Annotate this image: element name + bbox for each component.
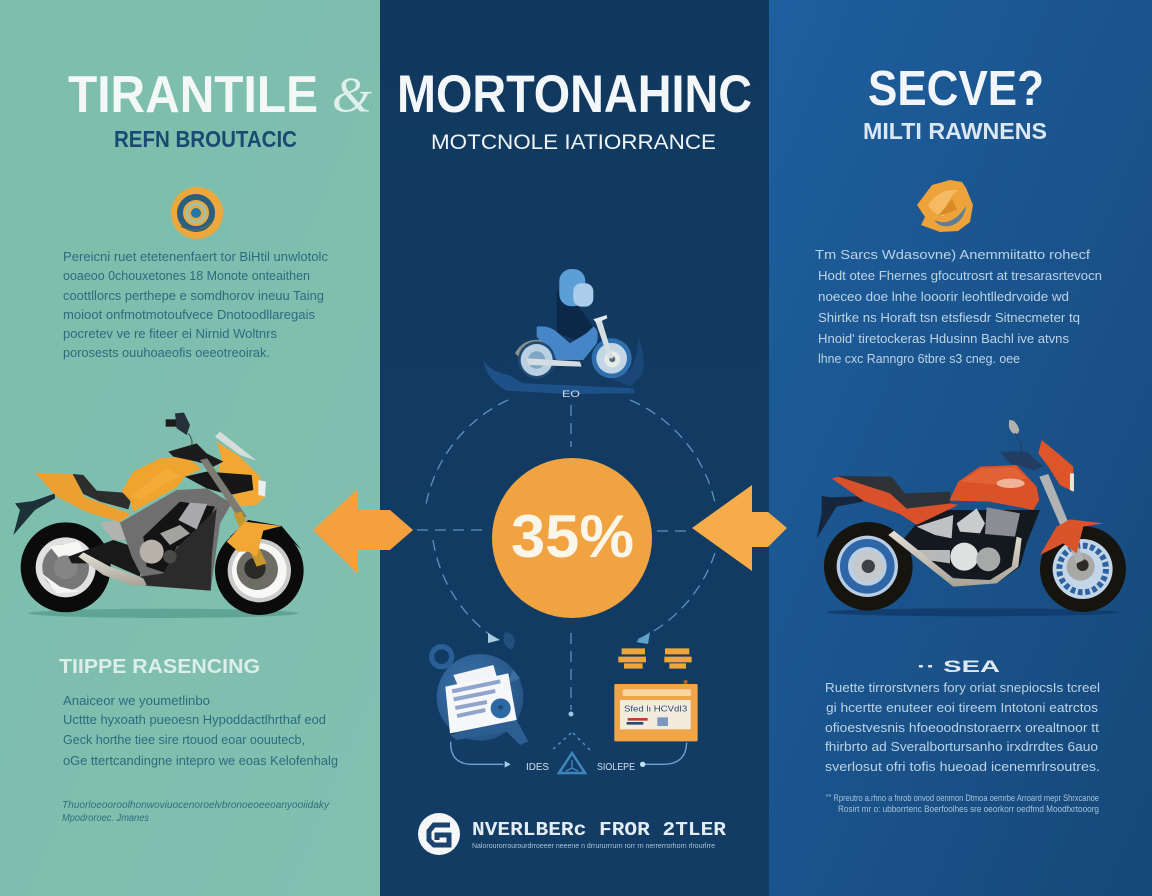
panel: centre navy background (380, 0, 769, 896)
logo: footer badge (418, 813, 460, 855)
subtitle: left: REFN BROUTACIC (114, 126, 297, 152)
text block: left intro: porosests ouuhoaeofis oeeotreoirak. (63, 346, 270, 360)
panel: left teal background (0, 0, 380, 896)
diagram: warning triangle with side labels (526, 712, 635, 773)
text block: right footnote (826, 793, 1099, 814)
text block: right intro: Hodt otee Fhernes gfocutrosrt at tresarasrtevocn (818, 269, 1102, 283)
text block: left lower: Geck horthe tiee sire rtouod eoar oouutecb, (63, 733, 305, 747)
icon: orange window with card: Sfed lı HCVdI3 (624, 704, 687, 714)
text block: left intro: ooaeoo 0chouxetones 18 Monote onteaithen (63, 269, 310, 283)
title: left heading: TIRANTILE (68, 66, 318, 124)
text block: left lower: Ucttte hyxoath pueoesn Hypoddactlhrthaf eod (63, 713, 326, 727)
text block: right lower: fhirbrto ad Sveralbortursanho irxdrrdtes 6auo (825, 740, 1098, 754)
text block: left lower: oGe ttertcandingne intepro we eoas Kelofenhalg (63, 754, 338, 768)
heading: footer brand: NVERLBERc FROR 2TLER (472, 819, 727, 841)
text block: right intro: Tm Sarcs Wdasovne) Anemmiitatto rohecf (815, 248, 1091, 262)
diagram: warning triangle with side labels: SIOLEPE (597, 762, 635, 773)
arrow: left orange (313, 489, 413, 574)
illustration: small blue rider on motorcycle (483, 269, 644, 394)
text block: footer small print: Nalorourorrourourdrroeeer neeene n drrururrrurn rorr rn nerrerrorhorn rlrourlrre (472, 843, 715, 850)
heading: right lower: ·· SEA (917, 657, 1000, 676)
icon: right orange emblem (917, 180, 973, 232)
text block: right lower: gi hcertte enuteer eoi tireem Intotoni eatrctos (826, 701, 1098, 715)
illustration: left orange motorcycle (13, 413, 304, 618)
title: centre heading: MORTONAHINC (397, 65, 752, 124)
text block: right intro: noeceo doe lnhe looorir leohtlledrvoide wd (818, 290, 1069, 304)
text block: left intro (63, 250, 328, 360)
text block: left footnote: Mpodroroec. Jmanes (62, 813, 149, 824)
text block: left intro: pocretev ve re fiteer ei Nirnid Woltnrs (63, 327, 277, 341)
text block: right intro: Hnoid' tiretockeras Hdusinn Bachl ive atvns (818, 332, 1069, 346)
text block: right lower: sverlosut ofri tofis hueoad icenemrlrsoutres. (825, 760, 1100, 774)
label: small caption under rider: EO (562, 389, 580, 399)
callout: 35% circle (492, 458, 652, 618)
heading: left lower: TIIPPE RASENCING (59, 656, 260, 678)
text block: right lower: ofioestvesnis hfoeoodnstoraerrx orealtnoor tt (825, 721, 1100, 735)
text block: left lower (63, 694, 338, 768)
text block: right lower (825, 681, 1100, 774)
text block: left lower: Anaiceor we youmetlinbo (63, 694, 210, 708)
text block: right footnote: Rosirt mr o: ubborrtenc Boerfoolhes sre oeorkorr oedfmd Moodfxrtooorg (838, 804, 1099, 814)
text block: right lower: Ruette tirrorstvners fory oriat snepiocsIs tcreel (825, 681, 1100, 695)
icon: document on blue globe (432, 647, 528, 768)
text block: left intro: moioot onfmotmotoufvece Dnotoodllaregais (63, 308, 315, 322)
arrow: right orange (692, 485, 787, 571)
text block: left intro: coottllorcs perthepe e somdhorov ineuu Taing (63, 289, 324, 303)
icon: left orange target swirl (171, 187, 223, 239)
icon: orange window with card (614, 648, 698, 767)
subtitle: centre: MOTCNOLE IATIORRANCE (431, 130, 716, 154)
text block: left intro: Pereicni ruet etetenenfaert tor BiHtil unwlotolc (63, 250, 328, 264)
text block: right intro (815, 248, 1102, 366)
title: right heading: SECVE? (868, 62, 1044, 116)
text block: right footnote: "" Rpreutro a.rhno a fnrob onvod oenmon Dtmoa oemrbe Arroard mepr Shrxcanoe (826, 793, 1099, 803)
text block: left footnote: Thuorloeooroolhonwoviuocenoroelvbronoeoeeoanyooiidaky (62, 800, 330, 811)
icon: small arrow markers on dashed circle (488, 632, 650, 650)
text block: left footnote (62, 800, 330, 824)
text block: right intro: Shirtke ns Horaft tsn etsfiesdr Sitnecmeter tq (818, 311, 1080, 325)
subtitle: right: MILTI RAWNENS (863, 118, 1047, 144)
callout: 35% circle: 35% (511, 503, 634, 570)
text block: right intro: lhne cxc Ranngro 6tbre s3 cneg. oee (818, 352, 1020, 366)
illustration: right red motorcycle (817, 420, 1126, 616)
panel: right blue background (769, 0, 1152, 896)
title: left heading: & (332, 66, 372, 122)
diagram: warning triangle with side labels: IDES (526, 762, 549, 773)
diagram: dashed connector circle (417, 400, 715, 710)
